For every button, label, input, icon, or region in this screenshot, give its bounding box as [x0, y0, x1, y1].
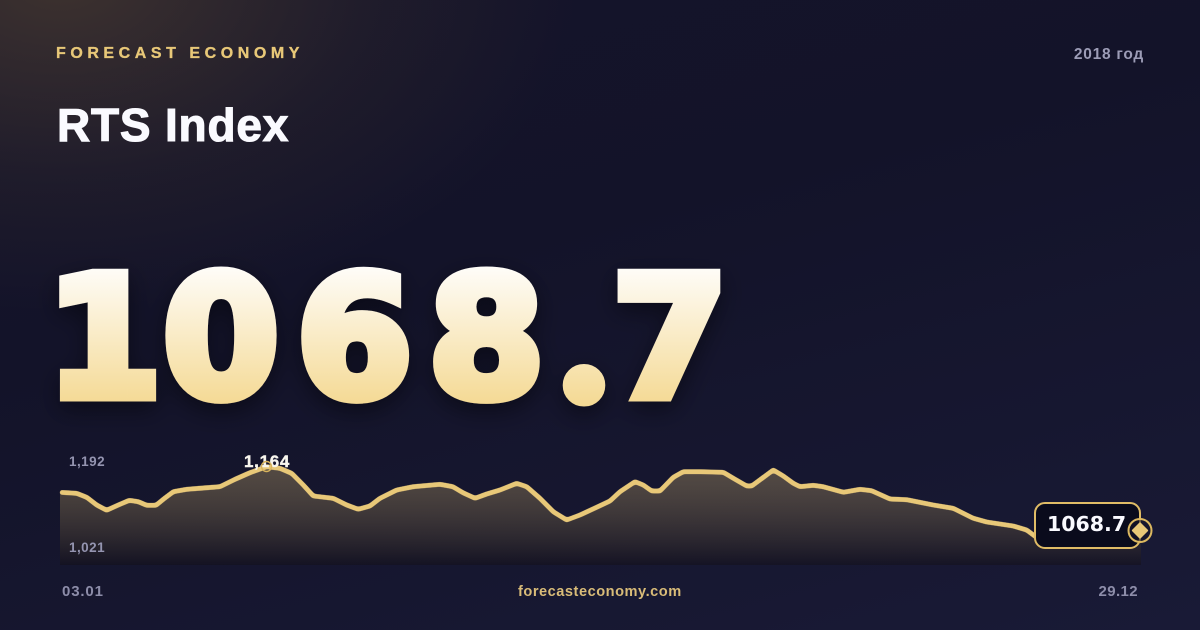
- chart line: [60, 467, 1040, 540]
- chart area fill: [40, 467, 1141, 565]
- peak value label: 1,164: [244, 452, 290, 471]
- website: forecasteconomy.com: [518, 584, 682, 600]
- big value: .: [553, 180, 615, 457]
- big value: 1: [46, 242, 162, 436]
- title: RTS Index: [57, 99, 289, 151]
- big value: 6: [296, 242, 413, 436]
- area chart: [40, 452, 1152, 565]
- big value: 8: [428, 242, 545, 436]
- brand label: FORECAST ECONOMY: [56, 45, 304, 62]
- start date: 03.01: [62, 583, 104, 600]
- end marker: [1128, 519, 1152, 542]
- peak marker: [262, 462, 272, 472]
- end date: 29.12: [1098, 583, 1138, 600]
- big value: 0: [163, 242, 279, 436]
- axis max label: 1,192: [69, 454, 105, 469]
- axis min label: 1,021: [69, 540, 105, 555]
- year label: 2018 год: [1074, 46, 1144, 63]
- big value: [46, 180, 728, 457]
- last value badge: 1068.7: [1047, 512, 1126, 536]
- big value: 7: [612, 242, 728, 436]
- last value badge: [1035, 503, 1140, 548]
